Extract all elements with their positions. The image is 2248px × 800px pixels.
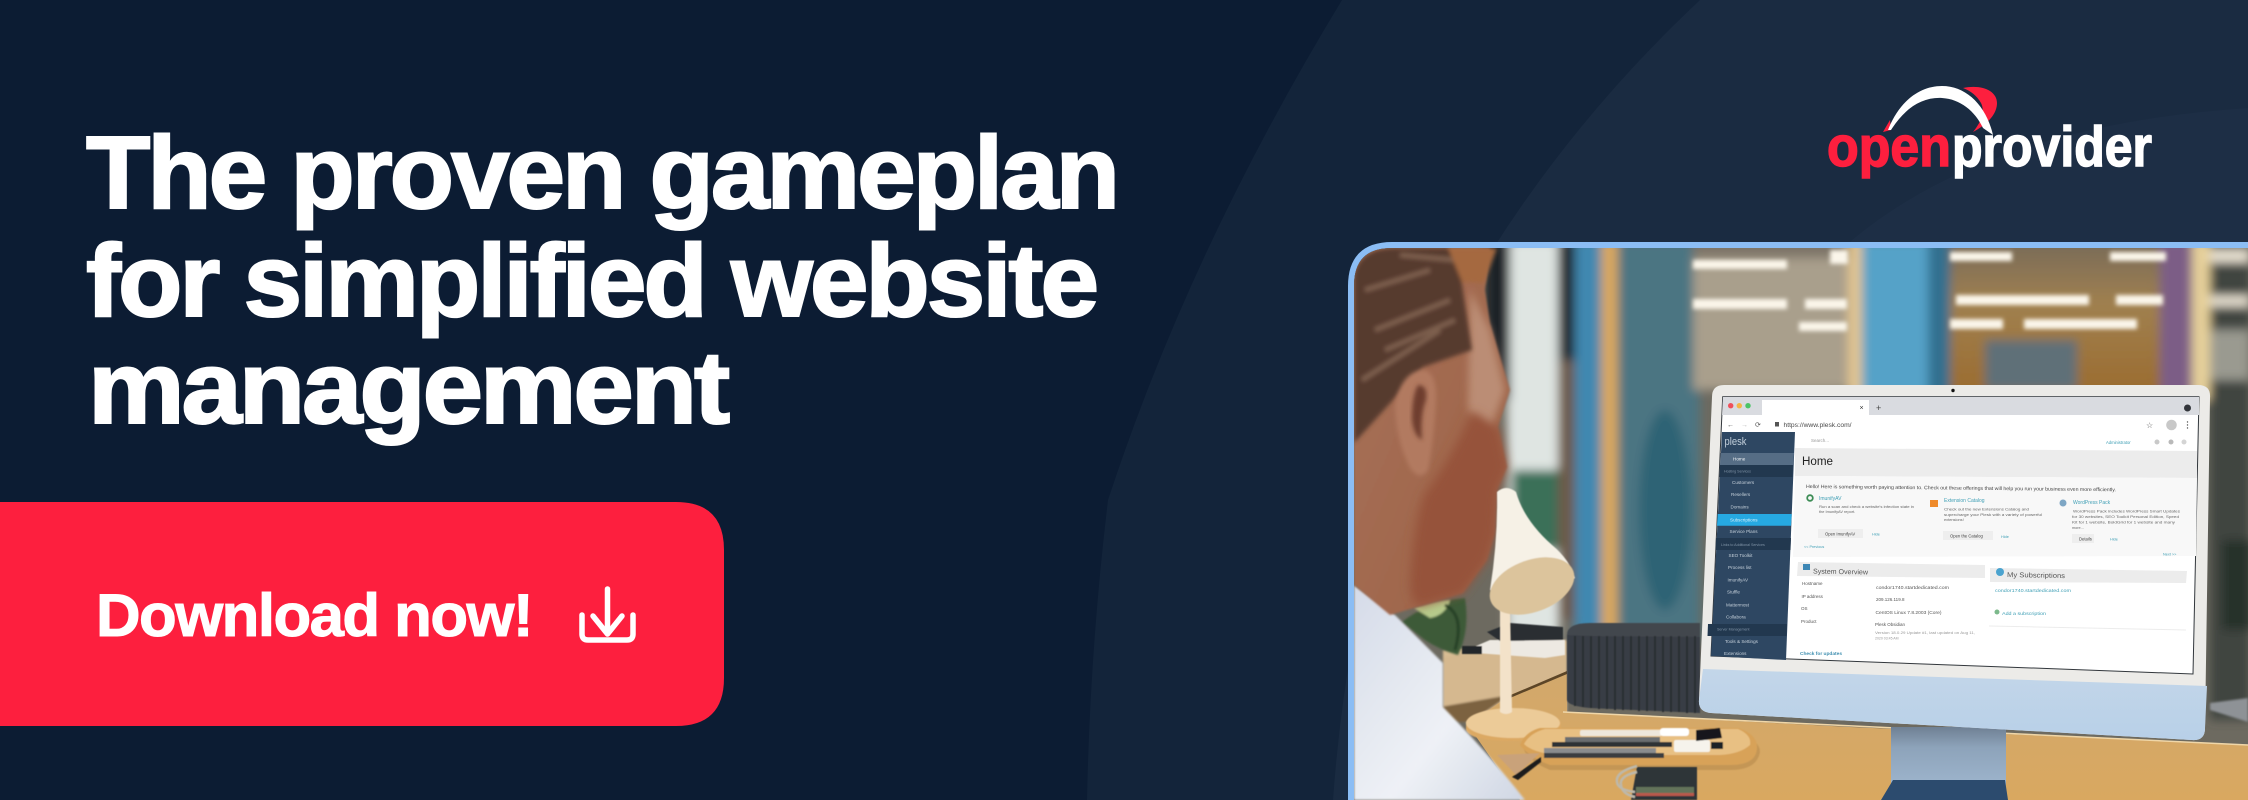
Plesk promo offers: Hide bbox=[2110, 538, 2118, 542]
Plesk system overview panel: Check for updates bbox=[1800, 651, 1842, 656]
Plesk sidebar: Server Management bbox=[1717, 628, 1750, 632]
Plesk sidebar: Collabora bbox=[1726, 614, 1746, 620]
Plesk promo offers: extensions! bbox=[1944, 517, 1964, 522]
icon: download bbox=[582, 589, 633, 640]
Plesk system overview panel: CentOS Linux 7.8.2003 (Core) bbox=[1876, 610, 1942, 615]
dark ribbed speaker bbox=[1567, 623, 1700, 713]
Plesk my subscriptions panel: Add a subscription bbox=[2002, 611, 2047, 616]
Plesk system overview panel: Hostname bbox=[1802, 581, 1823, 586]
cardboard sheet bbox=[1497, 753, 1541, 780]
beard bbox=[1410, 412, 1507, 607]
Plesk promo offers: ImunifyAV bbox=[1819, 496, 1842, 502]
logo wordmark bbox=[1827, 115, 2152, 179]
monitor stand bbox=[1881, 727, 2008, 800]
Plesk sidebar: Hosting Services bbox=[1724, 470, 1751, 474]
Plesk promo offers: Details bbox=[2079, 536, 2092, 542]
Plesk sidebar: Subscriptions bbox=[1730, 518, 1758, 522]
desk surface bbox=[1468, 672, 2248, 800]
Plesk promo offers: for 30 websites, SEO Toolkit Personal Edition, Speed bbox=[2072, 515, 2179, 519]
plant bbox=[1402, 598, 1466, 655]
Plesk system overview panel: System Overview bbox=[1813, 569, 1869, 576]
Plesk promo offers: supercharge your Plesk with a variety of powerful bbox=[1944, 512, 2042, 517]
logo arc bbox=[1883, 86, 1997, 135]
Plesk system overview panel: OS bbox=[1801, 606, 1808, 611]
Plesk promo offers: Hide bbox=[1872, 532, 1880, 536]
Plesk promo offers: Hello! Here is something worth paying attention to. Check out these offerings that will help you run your business even more efficiently. bbox=[1806, 484, 2116, 493]
Plesk sidebar: Links to Additional Services bbox=[1721, 543, 1765, 547]
Plesk sidebar: ImunifyAV bbox=[1728, 578, 1749, 582]
logo wordmark: open bbox=[1827, 115, 1951, 179]
Plesk promo offers: more... bbox=[2072, 526, 2084, 530]
Plesk top search bar: Administrator bbox=[2106, 440, 2131, 445]
Plesk sidebar: Mattermost bbox=[1726, 602, 1750, 608]
logo wordmark: provider bbox=[1952, 115, 2152, 179]
photo: man at a desk looking at monitor bbox=[1354, 240, 2248, 800]
Plesk sidebar: Extensions bbox=[1724, 651, 1747, 656]
Plesk promo offers: Open ImunifyAV bbox=[1825, 532, 1855, 536]
address bar: ☆ bbox=[2146, 421, 2153, 430]
address bar: ⟳ bbox=[1755, 422, 1761, 429]
laptop edge at right of monitor bbox=[2210, 698, 2248, 722]
Plesk promo offers: Kit for 1 website, BoldGrid for 1 website and many bbox=[2072, 520, 2175, 524]
Plesk my subscriptions panel: My Subscriptions bbox=[2007, 572, 2066, 580]
button label: Download now! bbox=[96, 582, 532, 649]
forehead highlight bbox=[1468, 290, 1505, 430]
Plesk system overview panel: condor1740.startdedicated.com bbox=[1876, 585, 1949, 590]
call to action button bbox=[0, 502, 724, 726]
Plesk promo offers: Run a scan and check a website's infection state in bbox=[1819, 504, 1914, 509]
ear bbox=[1395, 370, 1436, 476]
man: head bbox=[1354, 248, 1510, 615]
address bar: ← bbox=[1727, 422, 1734, 429]
Plesk sidebar: Process list bbox=[1728, 565, 1752, 570]
Plesk promo offers: Next >> bbox=[2163, 552, 2177, 556]
ceiling lights bbox=[1693, 250, 2166, 331]
Plesk promo offers: Hide bbox=[2001, 535, 2009, 539]
Plesk sidebar: Customers bbox=[1732, 480, 1755, 485]
man: shirt bbox=[1354, 585, 1525, 800]
Plesk sidebar: plesk bbox=[1724, 436, 1747, 448]
Plesk my subscriptions panel: condor1740.startdedicated.com bbox=[1995, 588, 2071, 593]
photo frame bbox=[1351, 245, 2248, 800]
Plesk sidebar: Stuffle bbox=[1727, 590, 1740, 594]
title: for simplified website bbox=[86, 223, 1096, 338]
Plesk top search bar: Search... bbox=[1811, 438, 1829, 443]
Plesk sidebar: Resellers bbox=[1731, 492, 1751, 497]
logo: openprovider bbox=[1827, 86, 2152, 179]
Plesk system overview panel: Plesk Obsidian bbox=[1875, 622, 1906, 627]
Plesk promo offers bbox=[1804, 484, 2180, 556]
monitor bbox=[1699, 385, 2210, 800]
browser tab bar: + bbox=[1876, 403, 1881, 413]
Plesk my subscriptions panel bbox=[1989, 568, 2187, 630]
Plesk sidebar: Home bbox=[1733, 456, 1746, 462]
Plesk promo offers: << Previous bbox=[1804, 545, 1824, 549]
Plesk home heading band: Home bbox=[1802, 456, 1833, 468]
Plesk system overview panel: 209.126.119.8 bbox=[1876, 597, 1905, 602]
Plesk system overview panel: Product bbox=[1801, 619, 1817, 624]
rear desk notebook and papers bbox=[1462, 623, 1565, 658]
face and neck bbox=[1354, 248, 1510, 615]
Plesk promo offers: WordPress Pack bbox=[2073, 500, 2111, 506]
spiral notebook bbox=[1617, 766, 1697, 800]
lamp base and pole bbox=[1466, 606, 1561, 741]
Plesk promo offers: the ImunifyAV report. bbox=[1819, 509, 1855, 514]
Plesk system overview panel: IP address bbox=[1802, 594, 1824, 599]
Plesk promo offers: Extension Catalog bbox=[1944, 498, 1985, 504]
address bar: → bbox=[1741, 422, 1748, 429]
Plesk sidebar bbox=[1708, 432, 1795, 660]
Plesk sidebar: SEO Toolkit bbox=[1728, 553, 1753, 558]
Plesk system overview panel: Version 18.0.29 Update #1, last updated on Aug 11, bbox=[1875, 631, 1975, 635]
Plesk promo offers: WordPress Pack includes WordPress Smart Updates bbox=[2073, 510, 2180, 514]
blurred office background bbox=[1354, 240, 2248, 800]
Plesk sidebar: Service Plans bbox=[1730, 529, 1758, 534]
Plesk system overview panel: 2020 03:45 AM bbox=[1875, 636, 1899, 640]
hair bbox=[1354, 248, 1497, 443]
title bbox=[86, 115, 1117, 445]
desk tray with pens bbox=[1520, 728, 1760, 770]
browser window and Plesk screen bbox=[1708, 397, 2199, 674]
title: management bbox=[88, 330, 730, 445]
Plesk top search bar bbox=[1811, 438, 2186, 444]
title: The proven gameplan bbox=[86, 115, 1117, 230]
browser tab bar: × bbox=[1860, 405, 1864, 412]
Plesk promo offers: Check out the new Extensions Catalog and bbox=[1944, 506, 2029, 512]
Plesk promo offers: Open the Catalog bbox=[1950, 534, 1983, 538]
browser tab bar bbox=[1722, 397, 2199, 415]
address bar bbox=[1727, 420, 2188, 430]
Plesk system overview panel bbox=[1797, 562, 1985, 656]
address bar: https://www.plesk.com/ bbox=[1784, 422, 1852, 429]
Plesk sidebar: Tools & Settings bbox=[1725, 639, 1759, 644]
monitor body and chin bbox=[1699, 385, 2210, 740]
rear desk bbox=[1440, 640, 1567, 725]
Plesk home heading band bbox=[1793, 448, 2197, 557]
lamp shade bbox=[1489, 488, 1576, 616]
Plesk sidebar: Domains bbox=[1730, 504, 1749, 510]
